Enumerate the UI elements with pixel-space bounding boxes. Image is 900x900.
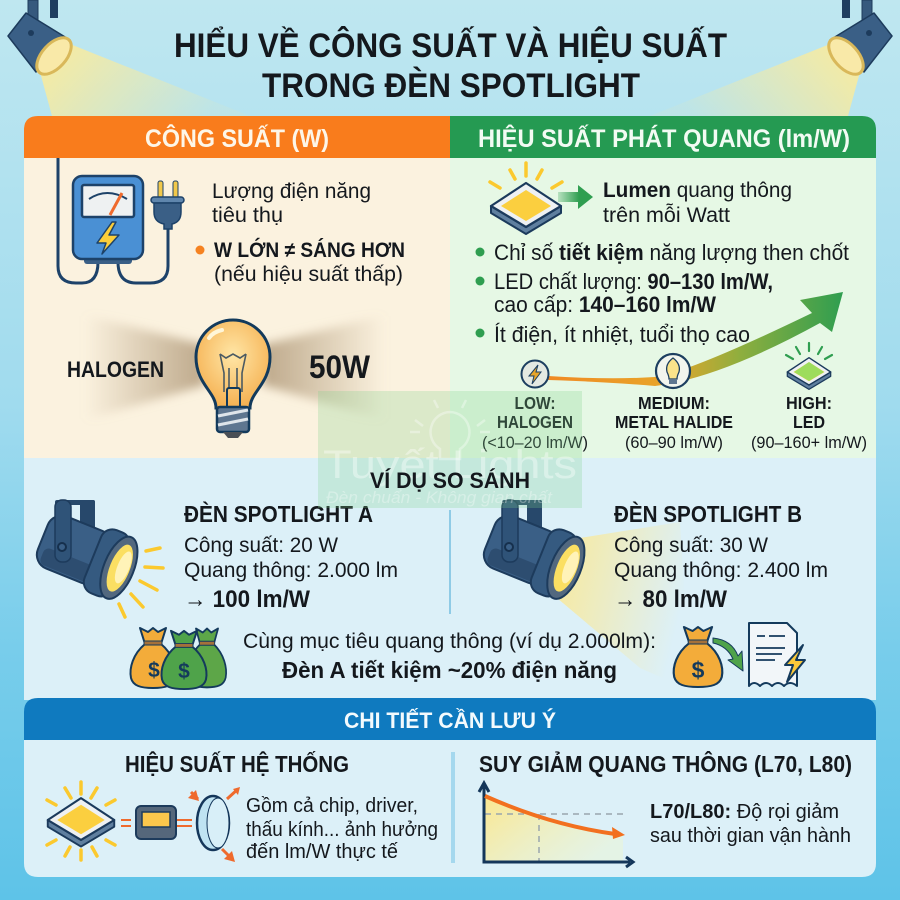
icon: medium efficiency lamp xyxy=(656,354,690,388)
list: efficiency facts xyxy=(476,240,849,347)
light rays around bulb xyxy=(85,315,385,420)
text: spotlight B specs xyxy=(614,500,828,613)
icon: spotlight B xyxy=(477,500,592,605)
heading: chi tiết cần lưu ý: CHI TIẾT CẦN LƯU Ý xyxy=(344,708,556,733)
text: lumen definition xyxy=(603,179,792,227)
watermark: Đèn chuẩn - Không gian chất xyxy=(326,488,553,507)
text: saving summary xyxy=(243,630,656,683)
text: power definition xyxy=(212,180,371,227)
label: low halogen xyxy=(482,393,588,452)
label: medium metal halide xyxy=(615,393,733,452)
label: high LED: HIGH: xyxy=(786,393,832,413)
icon: money bag to electric bill: $ xyxy=(692,657,705,683)
label: low halogen: (<10–20 lm/W) xyxy=(482,434,588,452)
heading: chi tiết cần lưu ý xyxy=(24,698,876,740)
subheading: suy giảm quang thông: SUY GIẢM QUANG THÔNG (L70, L80) xyxy=(479,749,852,777)
heading: hiệu suất phát quang xyxy=(450,116,876,158)
text: L70 L80 explanation: L70/L80: Độ rọi giảm xyxy=(650,801,839,823)
text: spotlight B specs: → 80 lm/W xyxy=(614,586,727,613)
panel: ví dụ so sánh xyxy=(24,458,876,700)
label: low halogen: LOW: xyxy=(514,393,556,413)
text: power definition: Lượng điện năng xyxy=(212,180,371,203)
title: HIỂU VỀ CÔNG SUẤT VÀ HIỆU SUẤT xyxy=(174,26,727,65)
text: system efficiency: đến lm/W thực tế xyxy=(246,841,398,863)
text: spotlight A specs: ĐÈN SPOTLIGHT A xyxy=(184,500,373,527)
icon: chip driver lens system xyxy=(47,782,240,862)
icon: high efficiency LED xyxy=(786,343,832,389)
panel: hiệu suất phát quang xyxy=(450,116,876,458)
text: saving summary: Cùng mục tiêu quang thông (ví dụ 2.000lm): xyxy=(243,630,656,653)
panel: công suất xyxy=(24,116,450,458)
icon: spotlight A xyxy=(30,500,163,617)
text: spotlight A specs xyxy=(184,500,398,613)
text: spotlight A specs: → 100 lm/W xyxy=(184,586,310,613)
text: spotlight B specs: ĐÈN SPOTLIGHT B xyxy=(614,500,802,527)
text: spotlight A specs: Công suất: 20 W xyxy=(184,533,339,557)
list: efficiency facts: LED chất lượng: 90–130 lm/W, xyxy=(494,269,773,294)
list: efficiency facts: Chỉ số tiết kiệm năng lượng then chốt xyxy=(494,240,849,265)
callout: higher watt is not brighter xyxy=(196,238,405,286)
label: 50W: 50W xyxy=(309,349,371,385)
text: L70 L80 explanation: sau thời gian vận hành xyxy=(650,825,851,847)
icon: ceiling spotlight right xyxy=(822,0,892,80)
callout: higher watt is not brighter: W LỚN ≠ SÁNG HƠN xyxy=(214,238,405,262)
text: L70 L80 explanation xyxy=(650,801,851,847)
title: TRONG ĐÈN SPOTLIGHT xyxy=(262,67,640,105)
text: spotlight A specs: Quang thông: 2.000 lm xyxy=(184,558,398,582)
icon: LED chip with arrow xyxy=(490,163,593,234)
heading: công suất xyxy=(24,116,450,158)
icon: money bags: $ xyxy=(148,659,160,682)
text: lumen definition: Lumen quang thông xyxy=(603,179,792,202)
chart: efficiency trend arrow xyxy=(522,292,843,389)
watermark xyxy=(318,391,582,508)
text: spotlight B specs: Công suất: 30 W xyxy=(614,533,769,557)
label: high LED: LED xyxy=(793,412,825,432)
light beam of spotlight B xyxy=(557,522,690,690)
light beam right xyxy=(650,44,860,116)
label: medium metal halide: (60–90 lm/W) xyxy=(625,434,723,452)
icon: ceiling spotlight left xyxy=(8,0,78,80)
label: halogen: HALOGEN xyxy=(67,357,164,382)
heading: hiệu suất phát quang: HIỆU SUẤT PHÁT QUANG (lm/W) xyxy=(478,123,850,153)
label: medium metal halide: METAL HALIDE xyxy=(615,412,733,432)
text: spotlight B specs: Quang thông: 2.400 lm xyxy=(614,558,828,582)
icon: halogen bulb xyxy=(196,320,270,438)
text: system efficiency: thấu kính... ảnh hưởng xyxy=(246,819,438,841)
list: efficiency facts: cao cấp: 140–160 lm/W xyxy=(494,292,716,317)
text: saving summary: Đèn A tiết kiệm ~20% điện năng xyxy=(282,657,617,683)
list: efficiency facts: Ít điện, ít nhiệt, tuổi thọ cao xyxy=(494,322,750,347)
light beam left xyxy=(40,44,250,116)
text: power definition: tiêu thụ xyxy=(212,204,283,227)
heading: ví dụ so sánh: VÍ DỤ SO SÁNH xyxy=(370,468,530,493)
icon: low efficiency bolt xyxy=(522,360,548,388)
text: system efficiency xyxy=(246,795,438,863)
callout: higher watt is not brighter: (nếu hiệu suất thấp) xyxy=(214,263,403,286)
text: lumen definition: trên mỗi Watt xyxy=(603,204,730,227)
subheading: hiệu suất hệ thống: HIỆU SUẤT HỆ THỐNG xyxy=(125,750,349,777)
icon: power meter and plug xyxy=(58,158,184,283)
text: system efficiency: Gồm cả chip, driver, xyxy=(246,795,418,817)
chart: lumen depreciation curve xyxy=(479,783,633,867)
panel: chi tiết cần lưu ý xyxy=(24,698,876,877)
label: medium metal halide: MEDIUM: xyxy=(638,393,710,413)
label: low halogen: HALOGEN xyxy=(497,412,573,432)
watermark: Tuyết Lights xyxy=(323,443,577,487)
label: high LED: (90–160+ lm/W) xyxy=(751,434,867,452)
title xyxy=(174,26,727,105)
heading: công suất: CÔNG SUẤT (W) xyxy=(145,123,329,153)
icon: money bag to electric bill xyxy=(674,623,805,687)
icon: money bags xyxy=(131,628,226,689)
icon: money bags: $ xyxy=(178,660,190,683)
label: high LED xyxy=(751,393,867,452)
